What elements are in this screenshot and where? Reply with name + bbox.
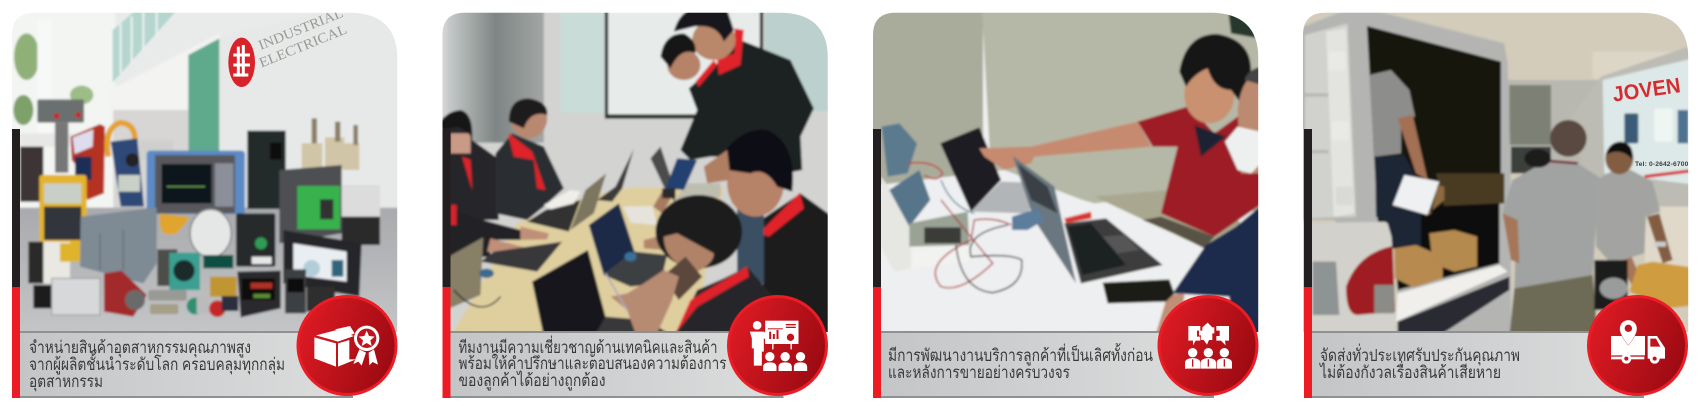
- arm and shirt: [979, 122, 1151, 170]
- text block: มีการพัฒนางานบริการลูกค้าที่เป็นเลิศทั้งก่อน: [888, 343, 1153, 366]
- white truck with sign: [1595, 47, 1688, 207]
- text block: จัดส่งทั่วประเทศรับประกันคุณภาพ: [1320, 343, 1520, 366]
- truck sign lettering: Tel: 0-2642-6700: [1635, 161, 1689, 168]
- front staff: [761, 192, 828, 332]
- truck sign lettering: JOVEN: [1611, 73, 1682, 107]
- photo: showroom and industrial products: [3, 3, 407, 341]
- test rig: [881, 176, 910, 271]
- icon: delivery truck with location pin: [1588, 296, 1686, 394]
- text block: ทีมงานมีความเชี่ยวชาญด้านเทคนิคและสินค้า: [458, 335, 718, 357]
- text block: [1318, 343, 1520, 382]
- text block: อุตสาหกรรม: [29, 372, 103, 392]
- text block: พร้อมให้คำปรึกษาและตอบสนองความต้องการ: [458, 353, 726, 373]
- truck sign lettering: [1611, 73, 1689, 168]
- photo: team meeting with laptops: [434, 3, 837, 340]
- panel: products card: [3, 3, 407, 398]
- text block: [888, 343, 1153, 382]
- panel: technical team card: [434, 3, 837, 398]
- text block: จำหน่ายสินค้าอุตสาหกรรมคุณภาพสูง: [29, 338, 251, 358]
- photo: loading boxes onto a truck: [1294, 3, 1698, 340]
- caption panel: [1312, 331, 1644, 398]
- wall sign: INDUSTRIAL: [257, 6, 346, 54]
- person standing: [1503, 161, 1600, 290]
- red accent bar: [12, 287, 20, 398]
- wall sign: ELECTRICAL: [257, 23, 349, 71]
- caption panel: [20, 331, 353, 398]
- black accent bar: [12, 129, 20, 287]
- icon: presenter and audience: [728, 296, 826, 394]
- text block: จากผู้ผลิตชั้นนำระดับโลก ครอบคลุมทุกกลุ่ม: [29, 352, 285, 375]
- panel: customer service card: [864, 3, 1268, 398]
- products: [28, 99, 380, 317]
- laptop 1: [940, 127, 1001, 212]
- red accent bar: [873, 287, 881, 398]
- laptop 2: [1013, 156, 1076, 283]
- boxes: [1394, 245, 1443, 287]
- wall sign: [258, 12, 347, 68]
- red accent bar: [442, 287, 450, 398]
- caption panel: [450, 331, 784, 398]
- cables: [908, 163, 1022, 293]
- text block: [458, 335, 726, 391]
- photo: engineers testing equipment: [864, 3, 1268, 340]
- text block: [29, 338, 285, 392]
- icon: box with award ribbon: [298, 296, 396, 394]
- standing staff: [680, 40, 815, 174]
- person in truck: [1369, 70, 1415, 157]
- rear door frame: [1294, 7, 1511, 337]
- red accent bar: [1304, 287, 1312, 398]
- panel: delivery card: [1294, 3, 1698, 398]
- icon: puzzle speech bubbles and people: [1159, 296, 1257, 394]
- laptops: [589, 203, 634, 275]
- logo: [228, 38, 255, 87]
- black accent bar: [873, 129, 881, 287]
- black accent bar: [442, 129, 450, 287]
- person at right: [1596, 170, 1660, 263]
- text block: ของลูกค้าได้อย่างถูกต้อง: [458, 370, 606, 391]
- black accent bar: [1304, 129, 1312, 287]
- caption panel: [881, 331, 1214, 398]
- text block: และหลังการขายอย่างครบวงจร: [888, 363, 1070, 382]
- second person: [1236, 80, 1258, 176]
- tail section: [1303, 220, 1396, 332]
- text block: ไม่ต้องกังวลเรื่องสินค้าเสียหาย: [1318, 360, 1501, 382]
